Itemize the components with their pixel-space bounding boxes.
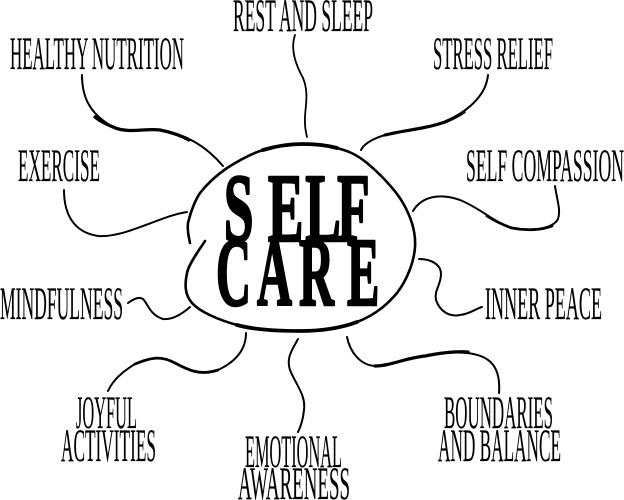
connector: exercise: [64, 190, 187, 236]
text: HEALTHY NUTRITION: [10, 28, 184, 80]
connector: inner peace: [419, 259, 482, 315]
label: boundaries and balance: [438, 387, 561, 472]
text: MINDFULNESS: [0, 278, 123, 330]
connector: joyful activities: [108, 333, 246, 391]
label: emotional awareness: [238, 426, 350, 500]
label: joyful activities: [61, 387, 156, 472]
connector: mindfulness: [128, 298, 190, 319]
text: ACTIVITIES: [61, 420, 156, 472]
text: EMOTIONAL: [245, 426, 342, 478]
connector: stress relief: [361, 75, 488, 150]
title: self care: SELF: [224, 154, 370, 262]
text: EXERCISE: [18, 140, 100, 192]
connector: boundaries and balance: [347, 337, 499, 393]
central blob outline: [186, 144, 415, 331]
connector: self compassion: [413, 186, 559, 230]
title: self care: CARE: [216, 219, 379, 327]
text: JOYFUL: [76, 387, 137, 439]
connector: healthy nutrition: [82, 75, 223, 166]
connector: rest and sleep: [293, 35, 307, 137]
title: self care: [216, 154, 379, 327]
connector: emotional awareness: [289, 339, 304, 432]
